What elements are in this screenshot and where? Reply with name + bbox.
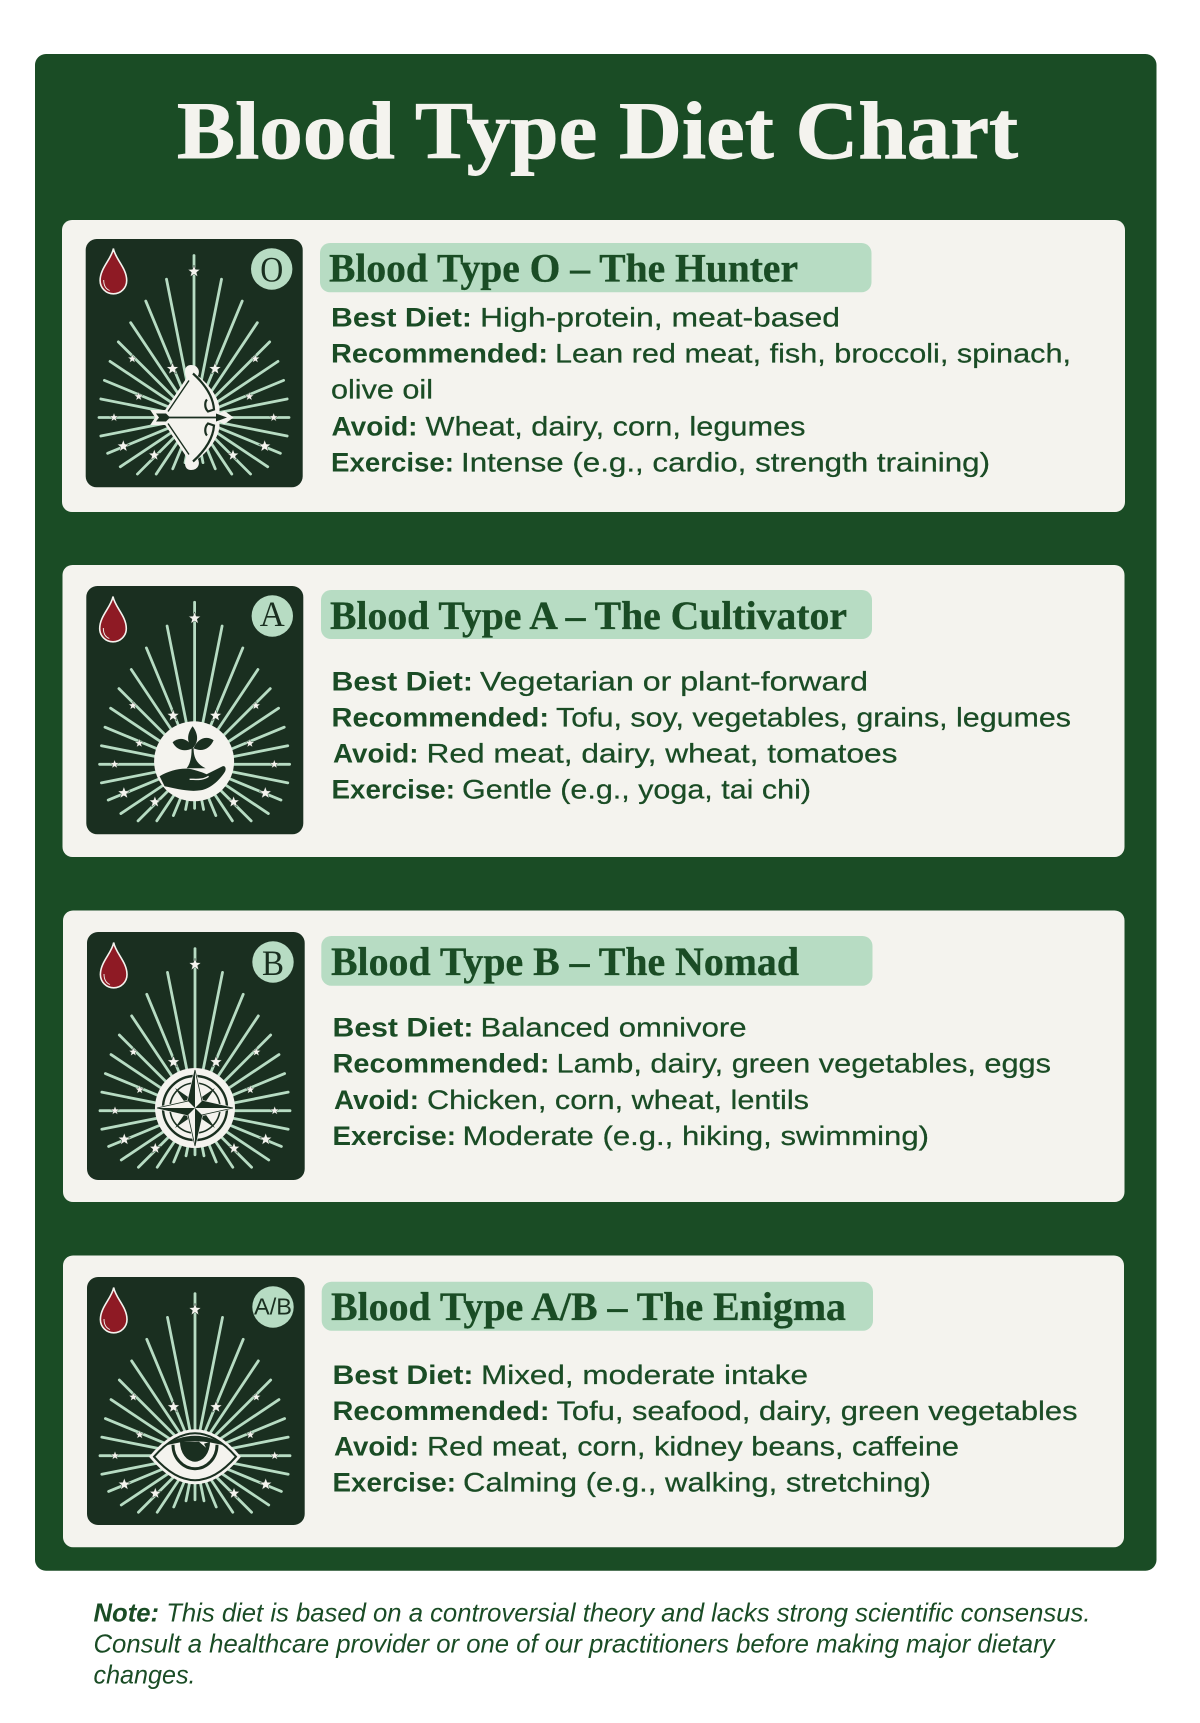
title: Blood Type Diet Chart	[177, 85, 1018, 176]
note	[94, 1600, 1090, 1689]
panel: Blood Type B	[63, 910, 1124, 1202]
text: details: Exercise:	[332, 1468, 456, 1498]
panel: Blood Type O	[62, 220, 1125, 512]
panel: Blood Type A/B	[63, 1256, 1124, 1547]
text: details: High-protein, meat-based	[480, 303, 840, 333]
text: details: Best Diet:	[332, 1360, 474, 1390]
text: details: Best Diet:	[331, 303, 472, 333]
text: details: Balanced omnivore	[480, 1013, 746, 1043]
icon: nomad emblem card: B	[262, 943, 284, 983]
text: details	[332, 667, 1071, 804]
icon: hunter emblem card: O	[260, 250, 283, 290]
text: details: Lean red meat, fish, broccoli, spinach,	[555, 339, 1071, 369]
heading: Blood Type O – The Hunter	[329, 246, 798, 291]
text: details	[331, 303, 1071, 478]
card background	[62, 220, 1125, 512]
text: details: Vegetarian or plant-forward	[480, 667, 868, 697]
text: details: Recommended:	[332, 1396, 550, 1426]
note: Note: This diet is based on a controversial theory and lacks strong scientific consensus.	[94, 1600, 1090, 1628]
text: details: Avoid:	[333, 739, 418, 769]
text: details: Tofu, soy, vegetables, grains, legumes	[556, 703, 1071, 733]
text: details: Recommended:	[332, 703, 549, 733]
text: details: Chicken, corn, wheat, lentils	[427, 1085, 809, 1115]
icon: enigma emblem card	[87, 1277, 305, 1525]
text: details: Intense (e.g., cardio, strength training)	[461, 448, 990, 478]
text: details: Avoid:	[334, 1085, 419, 1115]
text: details: Avoid:	[334, 1432, 419, 1462]
icon: cultivator emblem card: A	[260, 594, 285, 634]
card background	[63, 1256, 1124, 1547]
icon: enigma emblem card: A/B	[254, 1293, 292, 1319]
text: details: Recommended:	[332, 1049, 550, 1079]
card background	[62, 565, 1124, 857]
text: details	[332, 1013, 1051, 1151]
text: details: Gentle (e.g., yoga, tai chi)	[462, 774, 811, 804]
heading: Blood Type A – The Cultivator	[330, 593, 847, 638]
text: details: Red meat, dairy, wheat, tomatoes	[426, 739, 898, 769]
icon: nomad emblem card	[87, 932, 305, 1180]
text: details: Wheat, dairy, corn, legumes	[426, 412, 806, 442]
text: details	[332, 1360, 1078, 1498]
card background	[63, 910, 1124, 1202]
note: Consult a healthcare provider or one of our practitioners before making major dietary	[94, 1631, 1057, 1659]
text: details: Tofu, seafood, dairy, green vegetables	[556, 1396, 1078, 1426]
text: details: Avoid:	[332, 412, 418, 442]
heading: Blood Type A/B – The Enigma	[331, 1284, 846, 1329]
text: details: Moderate (e.g., hiking, swimming)	[462, 1121, 929, 1151]
panel: Blood Type A	[62, 565, 1124, 857]
text: details: Recommended:	[331, 339, 548, 369]
text: details: Best Diet:	[332, 667, 473, 697]
text: details: Lamb, dairy, green vegetables, eggs	[556, 1049, 1051, 1079]
text: details: olive oil	[331, 374, 433, 404]
text: details: Best Diet:	[332, 1013, 474, 1043]
note: changes.	[94, 1661, 196, 1689]
text: details: Exercise:	[332, 1121, 456, 1151]
text: details: Exercise:	[332, 774, 455, 804]
icon: hunter emblem card	[86, 239, 303, 487]
icon: cultivator emblem card	[86, 586, 303, 834]
text: details: Calming (e.g., walking, stretching)	[463, 1468, 931, 1498]
text: details: Mixed, moderate intake	[481, 1360, 808, 1390]
heading: Blood Type B – The Nomad	[331, 939, 799, 984]
text: details: Exercise:	[331, 448, 454, 478]
text: details: Red meat, corn, kidney beans, caffeine	[427, 1432, 959, 1462]
